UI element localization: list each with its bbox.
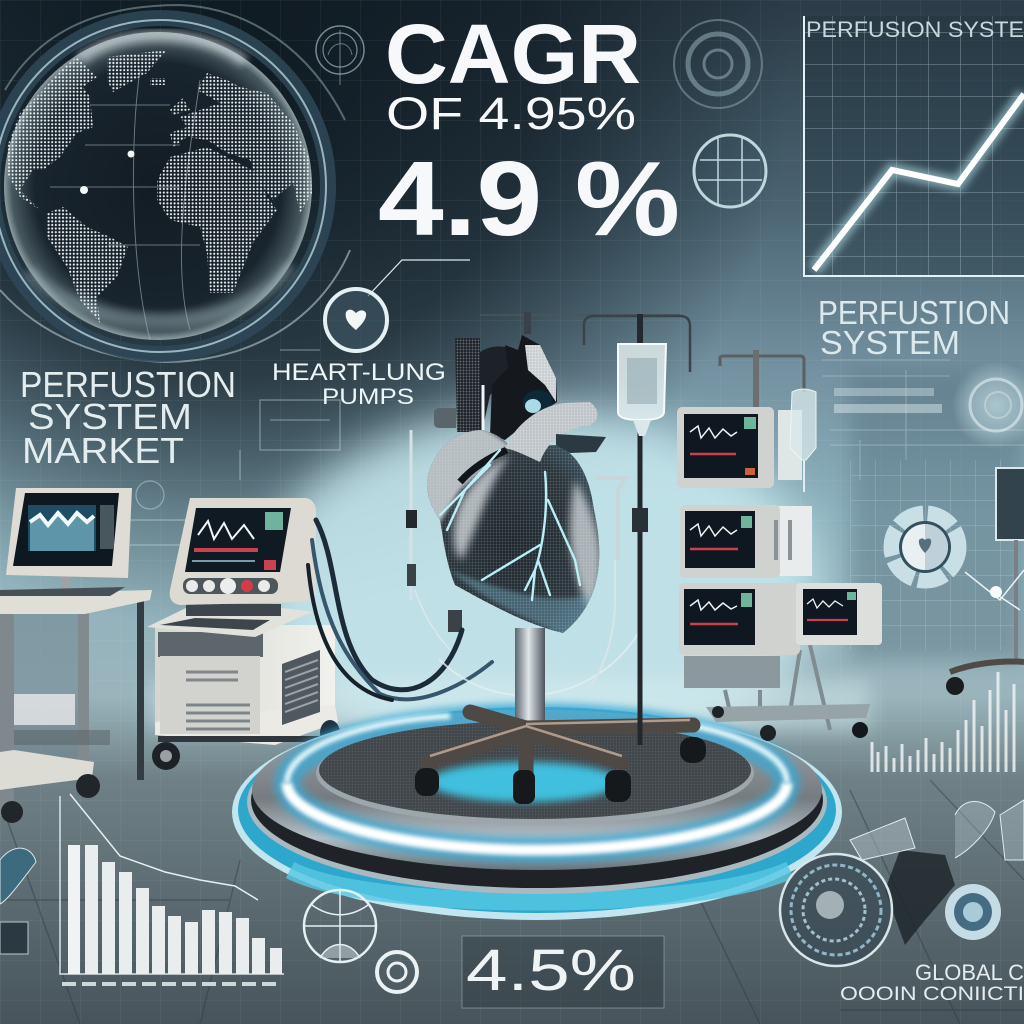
icon: callout circle with leader: [325, 260, 470, 351]
iv bottle: [790, 389, 816, 460]
panel: globe: [0, 5, 350, 362]
icon: holographic sphere: [780, 854, 892, 966]
label: global connectivity: [840, 960, 1024, 1005]
label: perfusion system right: SYSTEM: [820, 324, 960, 361]
heart-lung machine: [147, 498, 340, 770]
label: global connectivity: GLOBAL C: [915, 960, 1024, 985]
left IV line: [406, 430, 462, 655]
heading: 4.9 %: 4.9 %: [378, 140, 680, 258]
pulmonary artery: [505, 402, 598, 462]
platform: [232, 704, 842, 920]
monitor 4: [796, 583, 882, 645]
heading: perfusion system market: [20, 364, 236, 471]
heart light patches: [427, 430, 600, 633]
stat: 4.5%: [462, 936, 664, 1008]
icon: globe continents: [7, 50, 312, 323]
heart body: [427, 430, 599, 633]
tubes: [308, 520, 640, 700]
heading: perfusion system market: PERFUSTION: [20, 364, 236, 405]
machine debris lower right: [850, 800, 1024, 945]
heading: perfusion system market: MARKET: [22, 430, 184, 471]
title: [378, 7, 680, 258]
icon: small hud circles top: [316, 20, 766, 207]
chair base stand: [415, 628, 706, 804]
label: heart-lung pumps: HEART-LUNG: [272, 359, 446, 386]
label: heart-lung pumps: [272, 359, 446, 409]
monitor 2: [680, 505, 812, 578]
chart title: PERFUSION SYSTE: [806, 17, 1024, 42]
bar chart: bottom left: [60, 794, 284, 984]
chart: perfusion system line chart: [804, 16, 1024, 276]
mini bar chart right: [872, 672, 1014, 772]
stat: 4.5%: 4.5%: [466, 938, 636, 1003]
label: perfusion system right: [818, 294, 1010, 361]
globe lines: [50, 70, 200, 340]
stand: [720, 356, 804, 392]
heading: of 4.95%: OF 4.95%: [386, 88, 636, 139]
label: global connectivity: OOOIN CONIICTI: [840, 984, 1024, 1005]
cart: left table: [0, 587, 152, 823]
aorta: [490, 335, 557, 440]
icon: glowing circle right: [952, 361, 1024, 449]
trend line: [814, 94, 1024, 270]
heart: [420, 335, 610, 640]
heading: perfusion system market: SYSTEM: [28, 396, 192, 437]
icon: ring target bottom: [377, 952, 417, 992]
monitor: left: [6, 488, 132, 592]
icon: left edge lens: [0, 848, 36, 954]
icon: wireframe sphere bottom: [304, 890, 376, 962]
icon: segmented ring: [892, 514, 958, 580]
icon: target right bottom: [945, 884, 1001, 940]
superior vena cava: [455, 338, 515, 432]
coronary vessels: [440, 450, 580, 600]
label: heart-lung pumps: PUMPS: [322, 384, 414, 409]
panel: faint data right: [822, 360, 1024, 480]
monitor 1: [677, 407, 802, 488]
monitor 3: [679, 583, 800, 655]
icon: right edge IV stand: [946, 468, 1024, 695]
monitor stack right: [677, 350, 882, 741]
heading: CAGR: CAGR: [385, 7, 641, 101]
panel: faint schematics middle left: [130, 350, 340, 545]
iv stand and bag: [480, 312, 690, 745]
